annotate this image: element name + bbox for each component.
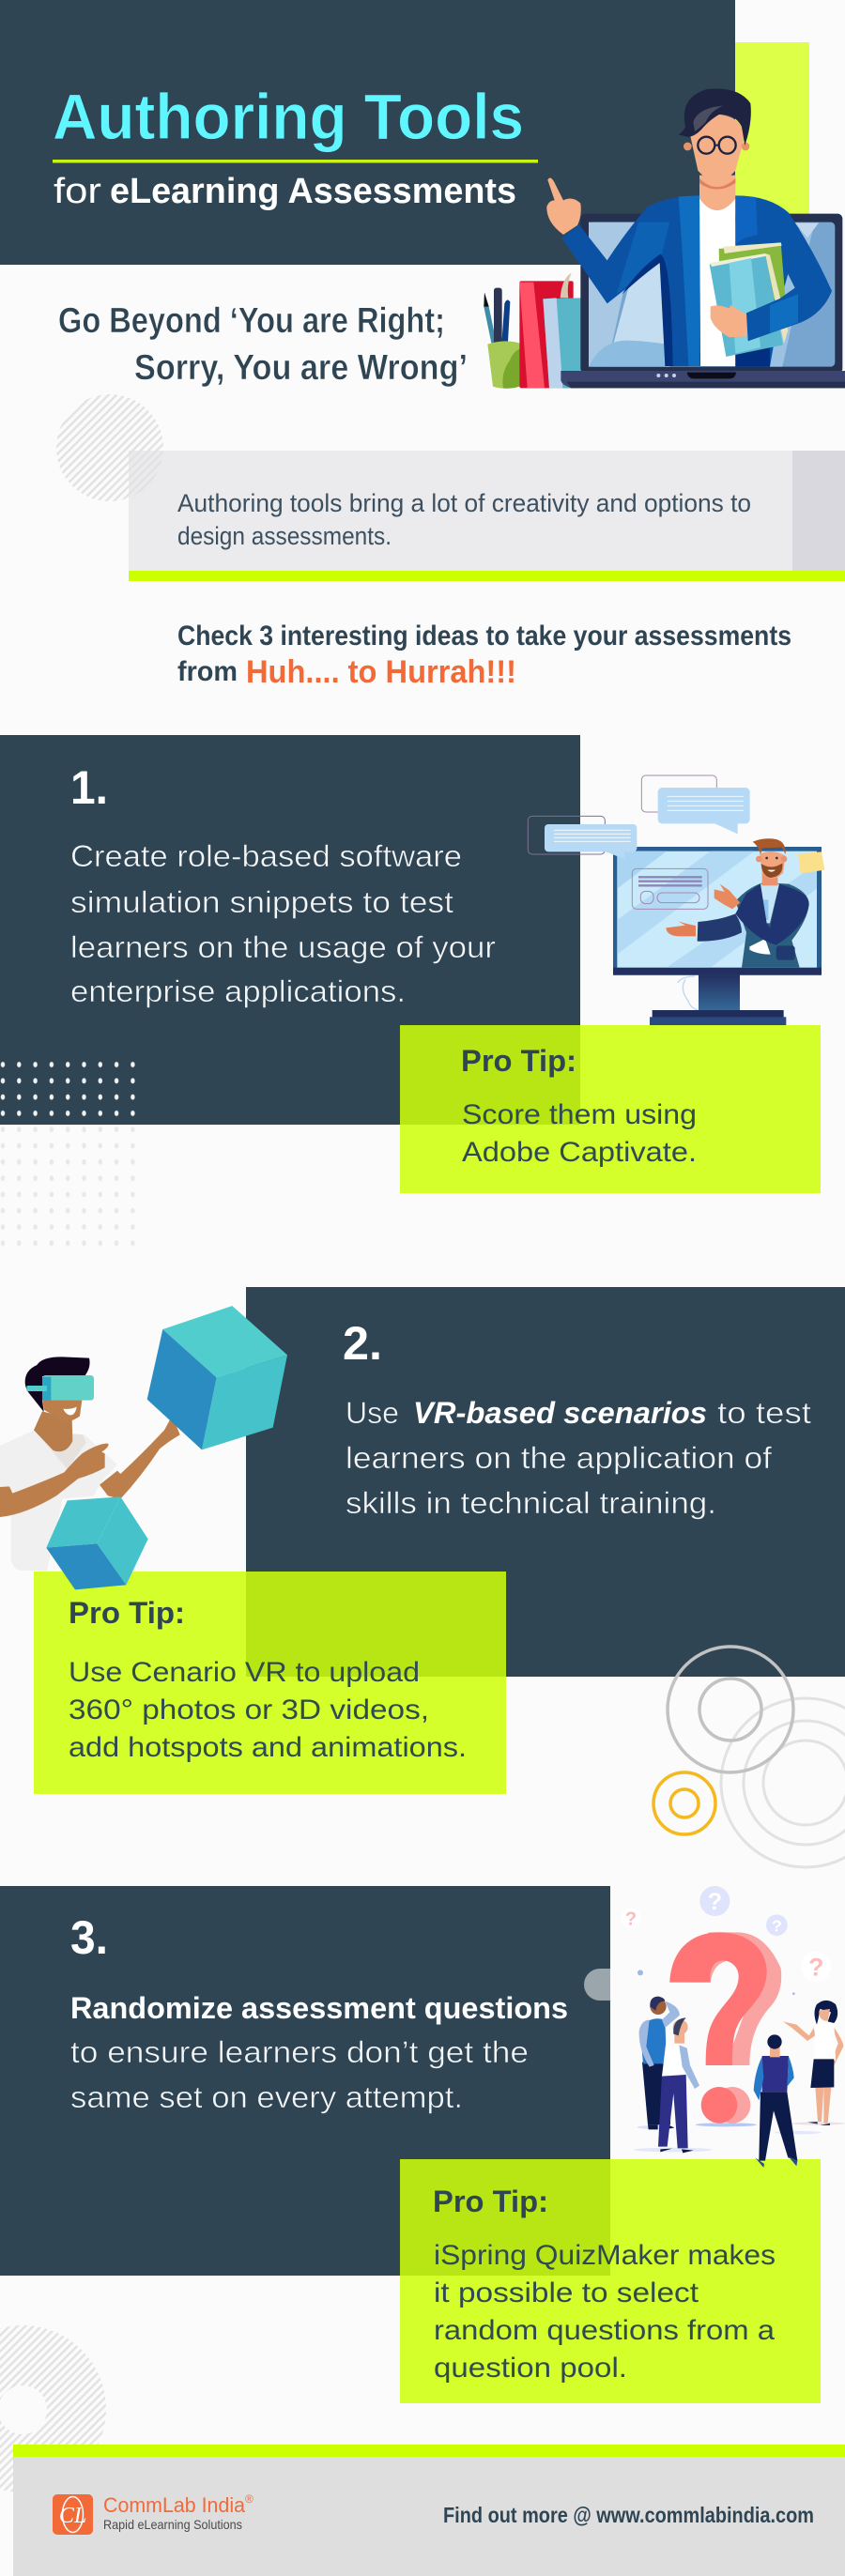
icon: woman: [783, 2001, 843, 2125]
intro text: design assessments.: [177, 522, 392, 550]
panel: idea 2 background: [246, 1287, 845, 1677]
idea 2 text: [346, 1396, 811, 1520]
call to action text: [177, 621, 791, 690]
number 2: 2.: [343, 1317, 382, 1370]
idea 1 text: simulation snippets to test: [70, 885, 453, 919]
icon: monitor: [613, 847, 822, 1025]
icon: logo: [53, 2494, 93, 2535]
idea 2 text: skills in technical training.: [346, 1486, 716, 1520]
number 1: 1.: [70, 761, 108, 814]
icon: logo: CL: [59, 2504, 86, 2528]
logo text: CommLab India: [103, 2493, 246, 2517]
pro tip 2: add hotspots and animations.: [69, 1732, 467, 1763]
pro tip 2: Pro Tip:: [69, 1596, 185, 1630]
panel: idea 1 background: [0, 735, 580, 1125]
icon: second chat bubble: [545, 824, 637, 859]
decorative grey blob: [584, 1969, 610, 2001]
icon: pen cup: [484, 288, 523, 389]
idea 3 text: [70, 1991, 568, 2114]
idea 1 text: [70, 839, 496, 1008]
icon: laptop: [561, 214, 845, 388]
pro tip 3: it possible to select: [434, 2277, 699, 2308]
logo text: ®: [245, 2492, 254, 2506]
heading: go beyond: Go Beyond ‘You are Right;: [58, 301, 445, 341]
illustration: people around question mark: [621, 1886, 845, 2168]
icon: person: [0, 1357, 180, 1571]
panel: header background: [0, 0, 735, 265]
idea 1 text: Create role-based software: [70, 839, 462, 873]
idea 2 text: learners on the application of: [346, 1441, 772, 1475]
hatched ring: [0, 2325, 106, 2492]
heading: go beyond: [58, 301, 468, 388]
call to action text: Huh.... to Hurrah!!!: [246, 654, 516, 690]
title: Authoring Tools: [53, 81, 524, 153]
idea 1 text: learners on the usage of your: [70, 930, 496, 964]
pro tip 3: [400, 2159, 821, 2403]
pro tip 3: random questions from a: [434, 2315, 775, 2346]
subtitle: eLearning Assessments: [110, 172, 516, 211]
icon: large cube: [147, 1306, 287, 1449]
pro tip 2: Use Cenario VR to upload: [69, 1657, 420, 1688]
pro tip 1: Pro Tip:: [461, 1044, 576, 1078]
idea 2 text: to test: [717, 1396, 811, 1430]
footer: [13, 2445, 845, 2576]
icon: large question mark: [669, 1932, 781, 2124]
decorative circles: [653, 1647, 845, 1867]
pro tip 3: iSpring QuizMaker makes: [434, 2240, 776, 2271]
title underline: [53, 160, 538, 163]
idea 2 text: VR-based scenarios: [413, 1396, 707, 1430]
icon: floor shadows: [634, 2122, 845, 2152]
illustration: presenter with laptop, books and pens: [484, 88, 845, 389]
pro tip 1: [400, 1025, 821, 1193]
dot pattern: [0, 1056, 141, 1251]
pro tip 3: Pro Tip:: [433, 2185, 548, 2218]
subtitle: for: [54, 172, 101, 211]
icon: small question bubbles: [621, 1886, 831, 1995]
icon: small question bubbles: ?: [625, 1909, 637, 1930]
intro text: Authoring tools bring a lot of creativity and options to: [177, 489, 751, 517]
heading: go beyond: Sorry, You are Wrong’: [134, 348, 468, 388]
section 1: [0, 735, 824, 1251]
logo text: Rapid eLearning Solutions: [103, 2517, 242, 2532]
icon: small question bubbles: ?: [708, 1889, 722, 1915]
icon: presenter: [666, 838, 809, 968]
call to action text: from: [177, 656, 238, 687]
icon: small question bubbles: ?: [808, 1954, 823, 1982]
idea 3 text: to ensure learners don’t get the: [70, 2035, 529, 2069]
icon: presenter: [546, 88, 832, 367]
pro tip 1: Score them using: [462, 1099, 697, 1130]
idea 3 text: Randomize assessment questions: [70, 1991, 568, 2025]
section 3: [0, 1886, 845, 2403]
icon: man scratching head: [639, 1997, 680, 2129]
illustration: presenter on monitor: [528, 775, 824, 1025]
panel: idea 3 background: [0, 1886, 610, 2276]
pro tip 2: 360° photos or 3D videos,: [69, 1694, 429, 1725]
icon: small question bubbles: ?: [772, 1916, 782, 1935]
icon: sticky note: [798, 851, 824, 874]
idea 1 text: enterprise applications.: [70, 974, 406, 1008]
icon: man in white shirt: [658, 2017, 699, 2153]
section 2: [0, 1287, 845, 1867]
pro tip 2: [34, 1572, 506, 1794]
idea 2 text: Use: [346, 1396, 399, 1430]
lime accent block: [735, 42, 809, 216]
panel: intro: [129, 451, 845, 581]
illustration: person with VR headset and cubes: [0, 1306, 287, 1589]
icon: small cube: [46, 1496, 148, 1589]
icon: man from behind: [754, 2034, 797, 2168]
icon: chat bubbles: [528, 775, 750, 854]
icon: stack of books: [519, 273, 581, 388]
pro tip 3: question pool.: [434, 2353, 627, 2384]
idea 3 text: same set on every attempt.: [70, 2080, 463, 2114]
intro text: [177, 489, 751, 550]
hatched circle: [56, 394, 163, 501]
pro tip 1: Adobe Captivate.: [462, 1137, 697, 1168]
number 3: 3.: [70, 1911, 108, 1964]
logo text: [103, 2492, 254, 2532]
